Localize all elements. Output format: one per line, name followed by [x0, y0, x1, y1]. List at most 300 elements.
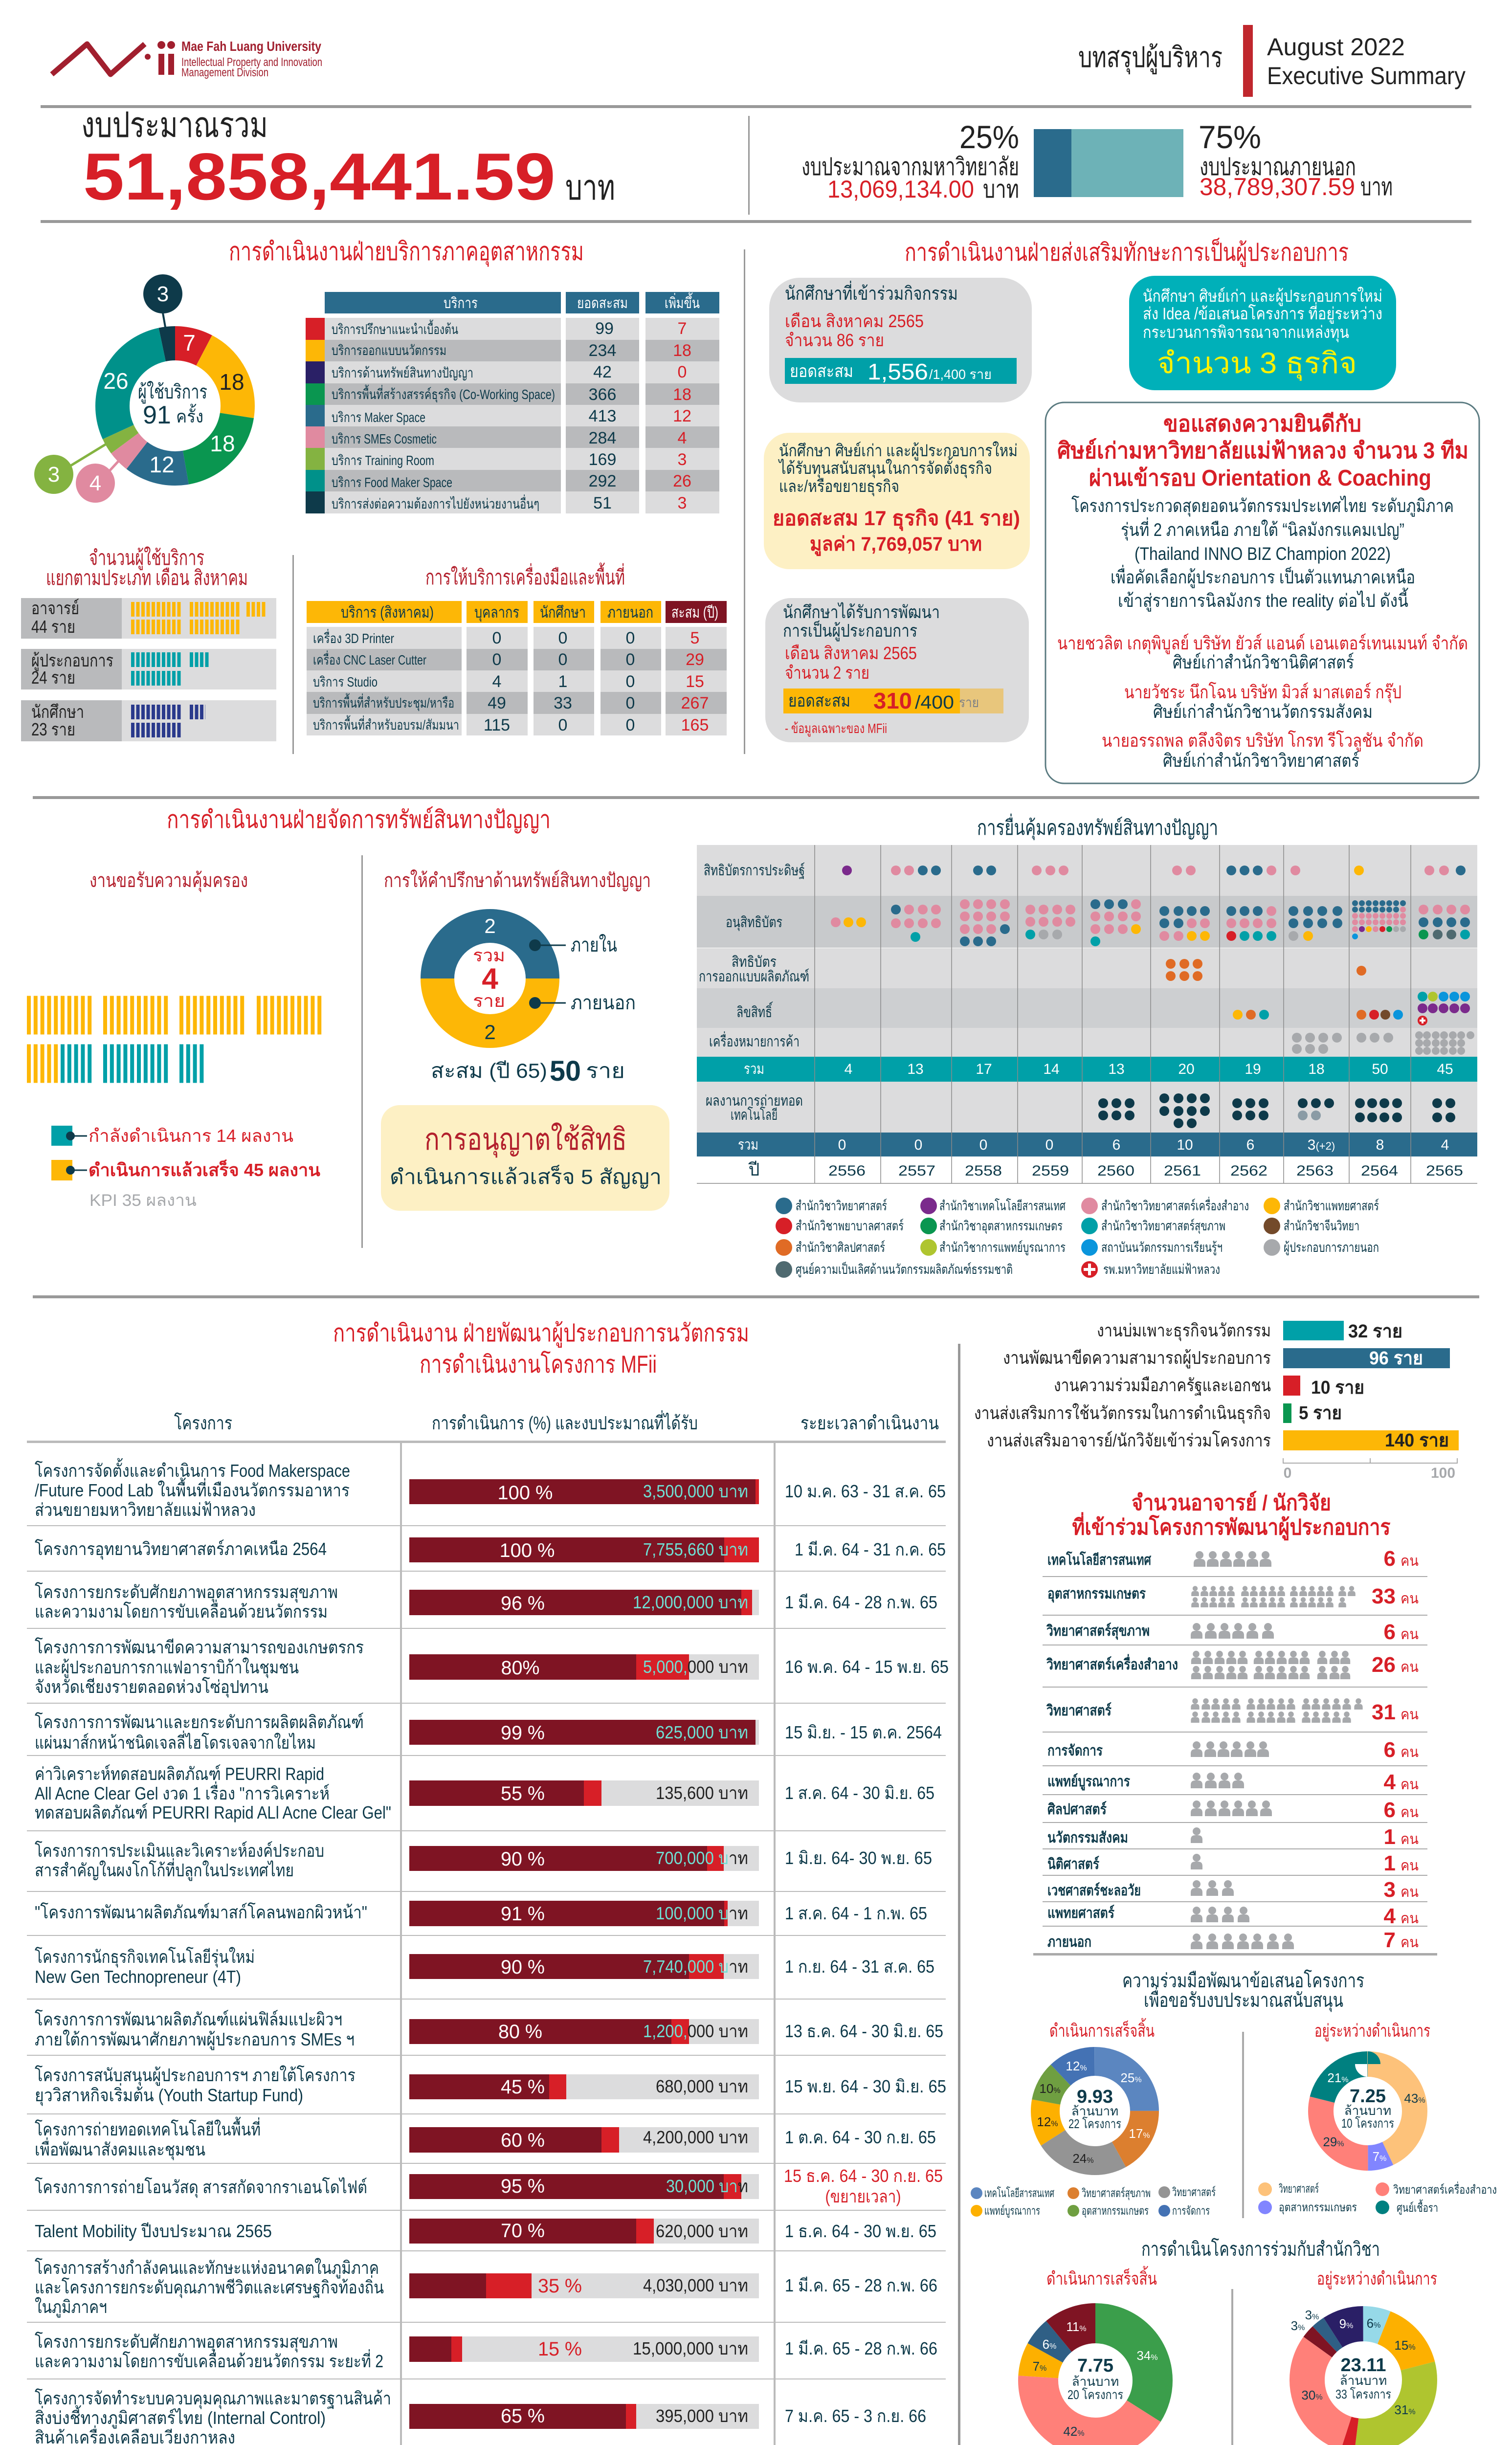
researchers pictogram: คน — [1401, 1858, 1419, 1874]
researchers pictogram: 6 — [1384, 1547, 1396, 1571]
IP filing matrix: 8 — [1376, 1137, 1384, 1153]
IP legend: สำนักวิชาจีนวิทยา — [1284, 1219, 1359, 1233]
project 11: 45 % — [501, 2076, 545, 2098]
project 4 — [35, 1637, 949, 1698]
IP filing matrix: ผลงานการถ่ายทอด — [706, 1093, 803, 1109]
project 1: 100 % — [498, 1482, 553, 1504]
header title — [1078, 25, 1466, 97]
project 1 — [35, 1458, 946, 1520]
card: students developed: 310 — [873, 688, 912, 713]
project 2: 100 % — [500, 1540, 555, 1561]
project 17: 7 ม.ค. 65 - 3 ก.ย. 66 — [785, 2406, 926, 2426]
donut: completed proposals: 10% — [1039, 2081, 1061, 2096]
donut: in-progress proposals: 10 โครงการ — [1341, 2116, 1394, 2131]
table: tools and spaces: เครื่อง 3D Printer — [313, 629, 394, 646]
card: funding: และ/หรือขยายธุรกิจ — [779, 477, 899, 496]
project 9: โครงการนักธุรกิจเทคโนโลยีรุ่นใหม่ — [35, 1947, 255, 1968]
user types chart: 23 ราย — [31, 719, 75, 739]
donut: in-progress with schools — [1291, 2308, 1420, 2445]
project 17: 65 % — [501, 2405, 545, 2427]
donut: users 91: 18 — [210, 431, 235, 456]
table: services: 366 — [589, 385, 616, 404]
IP filing matrix: 2564 — [1361, 1163, 1398, 1179]
IP legend: สำนักวิชาวิทยาศาสตร์สุขภาพ — [1101, 1218, 1225, 1234]
donut: in-progress proposals: ล้านบาท — [1344, 2103, 1391, 2118]
donut: completed proposals: 22 โครงการ — [1068, 2116, 1121, 2131]
donut: completed with schools: 7% — [1033, 2359, 1046, 2374]
donut: in-progress with schools: 33 โครงการ — [1335, 2387, 1391, 2401]
horizontal bar chart: participants: 100 — [1431, 1465, 1455, 1481]
card: students developed — [765, 598, 1029, 742]
licensing callout: ดำเนินการแล้วเสร็จ 5 สัญญา — [390, 1165, 662, 1189]
heading: projects: การดำเนินงาน ฝ่ายพัฒนาผู้ประกอบการนวัตกรรม — [333, 1319, 749, 1348]
budget split: บาท — [1360, 173, 1393, 200]
project 6: All Acne Clear Gel งวด 1 เรื่อง "การวิเคราะห์ — [35, 1781, 330, 1803]
table: tools and spaces: 4 — [492, 672, 501, 691]
budget split: 75% — [1199, 119, 1261, 155]
researchers pictogram: 3 — [1384, 1878, 1396, 1902]
horizontal bar chart: participants: งานส่งเสริมอาจารย์/นักวิจัยเข้าร่วมโครงการ — [987, 1430, 1271, 1450]
researchers pictogram: ศิลปศาสตร์ — [1047, 1801, 1107, 1818]
researchers pictogram: จำนวนอาจารย์ / นักวิจัย — [1132, 1490, 1331, 1515]
donut: completed with schools: ล้านบาท — [1072, 2374, 1119, 2389]
licensing callout: การอนุญาตใช้สิทธิ — [424, 1122, 627, 1157]
researchers pictogram: นวัตกรรมสังคม — [1047, 1830, 1128, 1846]
protection applications tick chart: ดำเนินการแล้วเสร็จ 45 ผลงาน — [89, 1159, 320, 1180]
donut: users 91: 4 — [89, 471, 101, 495]
IP legend: สำนักวิชาวิทยาศาสตร์ — [796, 1198, 887, 1213]
heading: projects — [333, 1319, 749, 1378]
user types chart: จำนวนผู้ใช้บริการ — [89, 546, 204, 570]
project 12: โครงการถ่ายทอดเทคโนโลยีในพื้นที่ — [35, 2116, 261, 2139]
card: ideas submitted: กระบวนการพิจารณาจากแหล่งทุน — [1143, 323, 1349, 342]
project 5: 99 % — [501, 1722, 545, 1744]
donut: users 91 — [34, 274, 245, 503]
IP filing matrix: สิทธิบัตรการประดิษฐ์ — [704, 862, 805, 879]
donut: completed with schools — [1033, 2319, 1158, 2439]
researchers pictogram: 4 — [1384, 1770, 1396, 1794]
column headers: ระยะเวลาดำเนินงาน — [800, 1413, 939, 1434]
column headers: การดำเนินการ (%) และงบประมาณที่ได้รับ — [432, 1410, 698, 1434]
table: services: บริการ Maker Space — [332, 410, 425, 425]
IP legend: สำนักวิชาแพทยศาสตร์ — [1284, 1198, 1379, 1213]
researchers pictogram: คน — [1401, 1744, 1419, 1760]
project 7: 1 มิ.ย. 64- 30 พ.ย. 65 — [785, 1848, 932, 1868]
horizontal bar chart: participants: 0 — [1284, 1465, 1291, 1481]
horizontal bar chart: participants: 140 ราย — [1385, 1430, 1449, 1451]
researchers pictogram: คน — [1401, 1831, 1419, 1847]
researchers pictogram: คน — [1401, 1553, 1419, 1569]
heading: IP: การดำเนินงานฝ่ายจัดการทรัพย์สินทางปัญญา — [167, 806, 551, 833]
table: services: 26 — [673, 472, 691, 490]
IP consultation donut: การให้คำปรึกษาด้านทรัพย์สินทางปัญญา — [384, 869, 651, 891]
researchers pictogram: 1 — [1384, 1851, 1396, 1875]
IP filing matrix: 2557 — [898, 1163, 935, 1179]
table: tools and spaces: 0 — [626, 672, 635, 691]
user types chart: แยกตามประเภท เดือน สิงหาคม — [46, 566, 248, 589]
project 17 — [35, 2388, 926, 2445]
project 9: 1 ก.ย. 64 - 31 ส.ค. 65 — [785, 1956, 934, 1977]
project 7: 700,000 บาท — [656, 1848, 748, 1868]
IP filing matrix: 19 — [1245, 1061, 1261, 1077]
budget split: 13,069,134.00 — [827, 176, 974, 203]
donut: users 91: 91 — [143, 401, 171, 429]
card: students joined — [769, 278, 1032, 402]
researchers pictogram: 4 — [1384, 1904, 1396, 1928]
table: services: 7 — [678, 319, 687, 338]
card: students developed: /400 — [915, 692, 954, 713]
researchers pictogram: แพทย์บูรณาการ — [1047, 1773, 1130, 1791]
column headers: โครงการ — [174, 1412, 232, 1434]
donut: completed with schools: 20 โครงการ — [1067, 2387, 1123, 2402]
IP consultation donut: 4 — [482, 962, 498, 995]
project 5 — [35, 1712, 942, 1753]
project 12 — [35, 2116, 936, 2160]
project 7: 90 % — [501, 1848, 545, 1870]
project 16: โครงการยกระดับศักยภาพอุตสาหกรรมสุขภาพ — [35, 2332, 338, 2353]
project 6: ทดสอบผลิตภัณฑ์ PEURRI Rapid ALl Acne Clear Gel" — [35, 1802, 391, 1823]
donut: in-progress with schools: 3% — [1291, 2318, 1305, 2333]
IP consultation donut — [384, 869, 651, 1087]
project 2: 1 มี.ค. 64 - 31 ก.ค. 65 — [795, 1539, 946, 1559]
researchers pictogram: เวชศาสตร์ชะลอวัย — [1047, 1882, 1141, 1899]
card: congratulations: รุ่นที่ 2 ภาคเหนือ ภายใต้ “นิลมังกรแคมเปญ” — [1121, 517, 1404, 541]
table: services: 42 — [593, 363, 612, 381]
project 12: 1 ต.ค. 64 - 30 ก.ย. 65 — [785, 2127, 936, 2147]
IP filing matrix: 0 — [914, 1137, 922, 1153]
IP consultation donut: 2 — [484, 914, 496, 937]
project 12: 4,200,000 บาท — [643, 2127, 748, 2147]
header title: Executive Summary — [1267, 62, 1466, 89]
donut: in-progress with schools: 6% — [1367, 2316, 1380, 2331]
card: students joined: 1,556 — [867, 359, 928, 384]
project 14: 1 ธ.ค. 64 - 30 พ.ย. 65 — [785, 2221, 936, 2241]
project 9: 90 % — [501, 1956, 545, 1978]
table: services: 413 — [589, 407, 616, 425]
heading: industrial services: การดำเนินงานฝ่ายบริการภาคอุตสาหกรรม — [229, 238, 584, 267]
card: students joined: /1,400 ราย — [929, 367, 992, 382]
table: services: 169 — [589, 450, 616, 469]
donut: completed proposals: 25% — [1120, 2070, 1142, 2085]
project 16: 1 มี.ค. 65 - 28 ก.พ. 66 — [785, 2338, 937, 2358]
project 13: 95 % — [501, 2176, 545, 2197]
donut: users 91: ผู้ใช้บริการ — [138, 380, 207, 403]
donut: completed with schools: 6% — [1043, 2337, 1056, 2352]
donut: in-progress proposals: 43% — [1404, 2091, 1425, 2106]
project 15 — [35, 2258, 937, 2318]
researchers pictogram: 31 — [1372, 1700, 1396, 1724]
project 5: แผ่นมาส์กหน้าชนิดเจลลี่ไฮโดรเจลจากใยไหม — [35, 1731, 316, 1753]
project 2: โครงการอุทยานวิทยาศาสตร์ภาคเหนือ 2564 — [35, 1539, 327, 1560]
project 14 — [35, 2219, 936, 2244]
donut: in-progress with schools: 31% — [1394, 2402, 1416, 2417]
project 10: 80 % — [498, 2021, 542, 2043]
IP filing matrix: การยื่นคุ้มครองทรัพย์สินทางปัญญา — [977, 814, 1218, 841]
proposal legends: ศูนย์เชื้อรา — [1397, 2199, 1438, 2215]
card: funding: ยอดสะสม 17 ธุรกิจ (41 ราย) — [773, 507, 1020, 531]
protection applications tick chart — [27, 870, 324, 1210]
donut: completed with schools: 11% — [1066, 2319, 1087, 2334]
card: ideas submitted: จำนวน 3 ธุรกิจ — [1157, 347, 1357, 381]
table: tools and spaces: นักศึกษา — [540, 603, 586, 621]
researchers pictogram: ที่เข้าร่วมโครงการพัฒนาผู้ประกอบการ — [1072, 1512, 1391, 1540]
project 7: สารสำคัญในผงโกโก้ที่ปลูกในประเทศไทย — [35, 1858, 294, 1881]
donut: completed proposals: 12% — [1066, 2059, 1087, 2073]
project 3: และความงามโดยการขับเคลื่อนด้วยนวัตกรรม — [35, 1600, 328, 1622]
table: tools and spaces: บริการพื้นที่สำหรับอบรม/สัมมนา — [313, 715, 459, 733]
project 10: 13 ธ.ค. 64 - 30 มิ.ย. 65 — [785, 2021, 943, 2041]
project 4: จังหวัดเชียงรายตลอดห่วงโซ่อุปทาน — [35, 1677, 268, 1698]
horizontal bar chart: participants: 96 ราย — [1369, 1348, 1423, 1369]
researchers pictogram: อุตสาหกรรมเกษตร — [1047, 1586, 1146, 1603]
project 1: 10 ม.ค. 63 - 31 ส.ค. 65 — [785, 1481, 946, 1501]
table: tools and spaces: 0 — [492, 629, 501, 647]
table: tools and spaces: 165 — [681, 716, 709, 734]
table: tools and spaces: 1 — [558, 672, 567, 691]
table: services: 4 — [678, 429, 687, 447]
IP consultation donut: ราย — [473, 991, 505, 1011]
researchers pictogram: คน — [1401, 1659, 1419, 1675]
project 12: 60 % — [501, 2130, 545, 2151]
table: tools and spaces: 0 — [558, 650, 567, 669]
IP filing matrix: อนุสิทธิบัตร — [726, 914, 782, 932]
donut: in-progress with schools: 30% — [1301, 2388, 1323, 2402]
IP filing matrix: เทคโนโลยี — [731, 1106, 778, 1123]
table: tools and spaces: 15 — [686, 672, 704, 691]
project 2 — [35, 1537, 946, 1562]
proposal legends: อุตสาหกรรมเกษตร — [1279, 2201, 1357, 2215]
card: congratulations: ศิษย์เก่าสำนักวิชานิติศาสตร์ — [1173, 652, 1354, 672]
IP filing matrix: 0 — [838, 1137, 846, 1153]
table: services: 18 — [673, 341, 691, 360]
researchers pictogram: แพทยศาสตร์ — [1047, 1905, 1114, 1921]
IP legend: สำนักวิชาวิทยาศาสตร์เครื่องสำอาง — [1101, 1197, 1249, 1213]
donut: in-progress with schools: ล้านบาท — [1340, 2373, 1387, 2388]
user types chart: อาจารย์ — [31, 598, 79, 618]
donut: completed proposals: 24% — [1072, 2151, 1094, 2166]
budget split: งบประมาณจากมหาวิทยาลัย — [801, 153, 1019, 180]
IP consultation donut: 2 — [484, 1021, 496, 1044]
project 5: โครงการการพัฒนาและยกระดับการผลิตผลิตภัณฑ์ — [35, 1712, 364, 1732]
card: students joined: นักศึกษาที่เข้าร่วมกิจกรรม — [785, 281, 958, 304]
table: tools and spaces: บริการ Studio — [313, 674, 378, 689]
researchers pictogram: การจัดการ — [1047, 1743, 1103, 1759]
table: tools and spaces: สะสม (ปี) — [671, 603, 718, 621]
project 8: 1 ส.ค. 64 - 1 ก.พ. 65 — [785, 1903, 927, 1923]
table: services: บริการ Training Room — [332, 453, 434, 468]
project 15: 35 % — [538, 2275, 582, 2297]
table: tools and spaces: 0 — [626, 650, 635, 669]
table: services: บริการส่งต่อความต้องการไปยังหน่วยงานอื่นๆ — [332, 494, 539, 511]
budget split: 38,789,307.59 — [1200, 173, 1355, 200]
user types chart: ผู้ประกอบการ — [31, 650, 113, 671]
donut: completed proposals: ล้านบาท — [1071, 2104, 1118, 2118]
project 8: 91 % — [501, 1903, 545, 1925]
project 10: โครงการการพัฒนาผลิตภัณฑ์แผ่นฟิล์มแปะผิวฯ — [35, 2009, 342, 2029]
card: congratulations: นายวัชระ นึกโฉน บริษัท มิวส์ มาสเตอร์ กรุ๊ป — [1124, 682, 1401, 703]
header title: August 2022 — [1267, 33, 1405, 61]
header logo: Intellectual Property and Innovation — [181, 56, 322, 69]
table: services: 12 — [673, 407, 691, 425]
researchers pictogram: คน — [1401, 1804, 1419, 1821]
project 4: 5,000,000 บาท — [643, 1657, 748, 1677]
donut: in-progress proposals: 21% — [1327, 2070, 1349, 2085]
IP filing matrix: รวม — [744, 1061, 764, 1077]
table: tools and spaces: 0 — [558, 629, 567, 647]
IP legend: สำนักวิชาศิลปศาสตร์ — [796, 1240, 885, 1255]
card: students developed: - ข้อมูลเฉพาะของ MFii — [785, 721, 887, 737]
IP filing matrix: 2556 — [828, 1163, 866, 1179]
table: services — [306, 292, 719, 513]
project 8: 100,000 บาท — [656, 1903, 748, 1923]
project 5: 625,000 บาท — [656, 1722, 748, 1742]
IP legend: ผู้ประกอบการภายนอก — [1284, 1240, 1379, 1255]
IP filing matrix: ลิขสิทธิ์ — [736, 1001, 773, 1021]
heading: entrepreneurship: การดำเนินงานฝ่ายส่งเสริมทักษะการเป็นผู้ประกอบการ — [905, 238, 1349, 267]
table: tools and spaces: ภายนอก — [607, 603, 653, 621]
proposal legends: อุตสาหกรรมเกษตร — [1082, 2204, 1149, 2218]
table: services: 0 — [678, 363, 687, 381]
researchers pictogram: เทคโนโลยีสารสนเทศ — [1047, 1551, 1152, 1568]
researchers pictogram — [1033, 1490, 1437, 1956]
panel: industrial services — [21, 238, 727, 754]
card: funding: นักศึกษา ศิษย์เก่า และผู้ประกอบการใหม่ — [779, 441, 1018, 461]
total budget: งบประมาณรวม — [81, 106, 268, 145]
project 9: New Gen Technopreneur (4T) — [35, 1967, 241, 1987]
IP consultation donut: ภายใน — [571, 934, 617, 956]
project 4: 80% — [501, 1657, 540, 1679]
table: tools and spaces: การให้บริการเครื่องมือและพื้นที่ — [425, 562, 625, 589]
horizontal bar chart: participants: งานพัฒนาขีดความสามารถผู้ประกอบการ — [1003, 1348, 1271, 1369]
horizontal bar chart: participants: งานความร่วมมือภาครัฐและเอกชน — [1054, 1375, 1271, 1396]
table: tools and spaces: 115 — [484, 716, 510, 734]
donut: users 91: 18 — [219, 369, 245, 395]
table: services: 18 — [673, 385, 691, 404]
header logo: Mae Fah Luang University — [181, 39, 321, 54]
horizontal bar chart: participants: 10 ราย — [1311, 1378, 1364, 1398]
project 16: 15,000,000 บาท — [633, 2338, 748, 2358]
card: congratulations: ศิษย์เก่าสำนักวิชาวิทยาศาสตร์ — [1163, 751, 1359, 771]
donut: completed with schools: 42% — [1063, 2424, 1085, 2439]
researchers pictogram: วิทยาศาสตร์สุขภาพ — [1046, 1623, 1150, 1640]
project 13: 30,000 บาท — [666, 2176, 748, 2196]
project 6: 1 ส.ค. 64 - 30 มิ.ย. 65 — [785, 1783, 934, 1803]
project 11: โครงการสนับสนุนผู้ประกอบการฯ ภายใต้โครงการ — [35, 2065, 356, 2086]
IP consultation donut: รวม — [473, 945, 505, 965]
project 7: โครงการการประเมินและวิเคราะห์องค์ประกอบ — [35, 1841, 324, 1861]
project 4: และผู้ประกอบการกาแฟอาราบิก้าในชุมชน — [35, 1657, 299, 1678]
project 15: 1 มี.ค. 65 - 28 ก.พ. 66 — [785, 2275, 937, 2295]
project 1: โครงการจัดตั้งและดำเนินการ Food Makerspace — [35, 1458, 350, 1481]
proposal legends: การจัดการ — [1172, 2204, 1210, 2218]
project 15: 4,030,000 บาท — [643, 2275, 748, 2295]
researchers pictogram: คน — [1401, 1591, 1419, 1607]
header logo: Management Division — [181, 66, 268, 79]
card: congratulations: ศิษย์เก่าสำนักวิชานวัตกรรมสังคม — [1153, 702, 1373, 722]
IP legend: รพ.มหาวิทยาลัยแม่ฟ้าหลวง — [1103, 1262, 1220, 1277]
horizontal bar chart: participants: 32 ราย — [1348, 1321, 1402, 1342]
donut: completed proposals: 9.93 — [1077, 2087, 1113, 2107]
table: tools and spaces: 267 — [681, 694, 709, 712]
donut: users 91: 7 — [183, 330, 196, 356]
protection applications tick chart: กำลังดำเนินการ 14 ผลงาน — [89, 1126, 293, 1146]
researchers pictogram: 6 — [1384, 1738, 1396, 1762]
researchers pictogram: 33 — [1372, 1584, 1396, 1608]
project 16 — [35, 2332, 937, 2371]
panel: innovation entrepreneur projects — [27, 1319, 949, 2445]
project 3: 1 มี.ค. 64 - 28 ก.พ. 65 — [785, 1592, 937, 1612]
researchers pictogram: 7 — [1384, 1928, 1396, 1952]
donut: in-progress proposals — [1321, 2064, 1425, 2164]
IP filing matrix: 6 — [1112, 1137, 1120, 1153]
panel: collaboration proposals: เพื่อขอรับงบประมาณสนับสนุน — [1144, 1987, 1343, 2012]
project 11: ยุววิสาหกิจเริ่มต้น (Youth Startup Fund) — [35, 2083, 303, 2106]
proposal legends: วิทยาศาสตร์ — [1279, 2182, 1319, 2196]
project 8 — [35, 1901, 927, 1926]
panel: collaboration proposals: ดำเนินการเสร็จสิ้น — [1049, 2018, 1155, 2041]
IP filing matrix: 2560 — [1097, 1163, 1134, 1179]
table: tools and spaces: บุคลากร — [474, 603, 519, 622]
card: students joined: จำนวน 86 ราย — [785, 330, 884, 350]
donut: users 91: 3 — [157, 282, 169, 306]
donut: users 91: 26 — [103, 368, 129, 394]
researchers pictogram: คน — [1401, 1626, 1419, 1643]
horizontal bar chart: participants: งานบ่มเพาะธุรกิจนวัตกรรม — [1097, 1320, 1271, 1341]
IP legend: สถาบันนวัตกรรมการเรียนรู้ฯ — [1101, 1240, 1223, 1255]
table: tools and spaces: บริการพื้นที่สำหรับประชุม/หารือ — [313, 693, 454, 711]
card: students developed: จำนวน 2 ราย — [785, 663, 869, 683]
budget split: บาท — [983, 176, 1019, 203]
card: students developed: ราย — [959, 695, 979, 710]
proposal legends: แพทย์บูรณาการ — [984, 2204, 1040, 2218]
IP filing matrix: 4 — [845, 1061, 852, 1077]
donut: in-progress proposals: 7% — [1373, 2149, 1386, 2164]
table: services: 234 — [589, 341, 616, 360]
donut: users 91: ครั้ง — [176, 403, 203, 426]
table: services: 292 — [589, 472, 616, 490]
horizontal bar chart: participants: 5 ราย — [1299, 1403, 1342, 1423]
budget split: งบประมาณภายนอก — [1200, 153, 1356, 180]
total budget: 51,858,441.59 — [83, 139, 556, 214]
project 6 — [35, 1764, 934, 1823]
table: tools and spaces: 49 — [488, 694, 506, 712]
card: funding: มูลค่า 7,769,057 บาท — [810, 533, 982, 556]
project 16: และความงามโดยการขับเคลื่อนด้วยนวัตกรรม ระยะที่ 2 — [35, 2349, 383, 2371]
IP filing matrix: 45 — [1437, 1061, 1453, 1077]
IP filing matrix: 18 — [1308, 1061, 1325, 1077]
panel: entrepreneurship skills — [764, 238, 1479, 783]
donut: completed with schools: 34% — [1136, 2348, 1158, 2363]
project 13 — [35, 2166, 943, 2206]
panel: projects with schools: อยู่ระหว่างดำเนินการ — [1317, 2268, 1437, 2289]
card: students developed: การเป็นผู้ประกอบการ — [783, 620, 917, 642]
IP filing matrix: เครื่องหมายการค้า — [709, 1031, 800, 1050]
total budget: บาท — [565, 168, 615, 207]
IP legend: ศูนย์ความเป็นเลิศด้านนวัตกรรมผลิตภัณฑ์ธรรมชาติ — [796, 1261, 1013, 1277]
project 7 — [35, 1841, 932, 1881]
table: tools and spaces: 5 — [690, 629, 699, 647]
project 3 — [35, 1582, 937, 1622]
panel: collaboration proposals: อยู่ระหว่างดำเนินการ — [1314, 2021, 1430, 2042]
table: tools and spaces: 33 — [554, 694, 572, 712]
project 11: 15 พ.ย. 64 - 30 มิ.ย. 65 — [785, 2076, 946, 2096]
card: congratulations: (Thailand INNO BIZ Champion 2022) — [1134, 544, 1391, 564]
project 10 — [35, 2009, 943, 2050]
card: ideas submitted: ส่ง Idea /ข้อเสนอโครงการ ที่อยู่ระหว่าง — [1143, 302, 1382, 324]
researchers pictogram: ภายนอก — [1047, 1934, 1091, 1950]
IP filing matrix: 17 — [976, 1061, 992, 1077]
donut: in-progress with schools: 9% — [1339, 2316, 1353, 2331]
